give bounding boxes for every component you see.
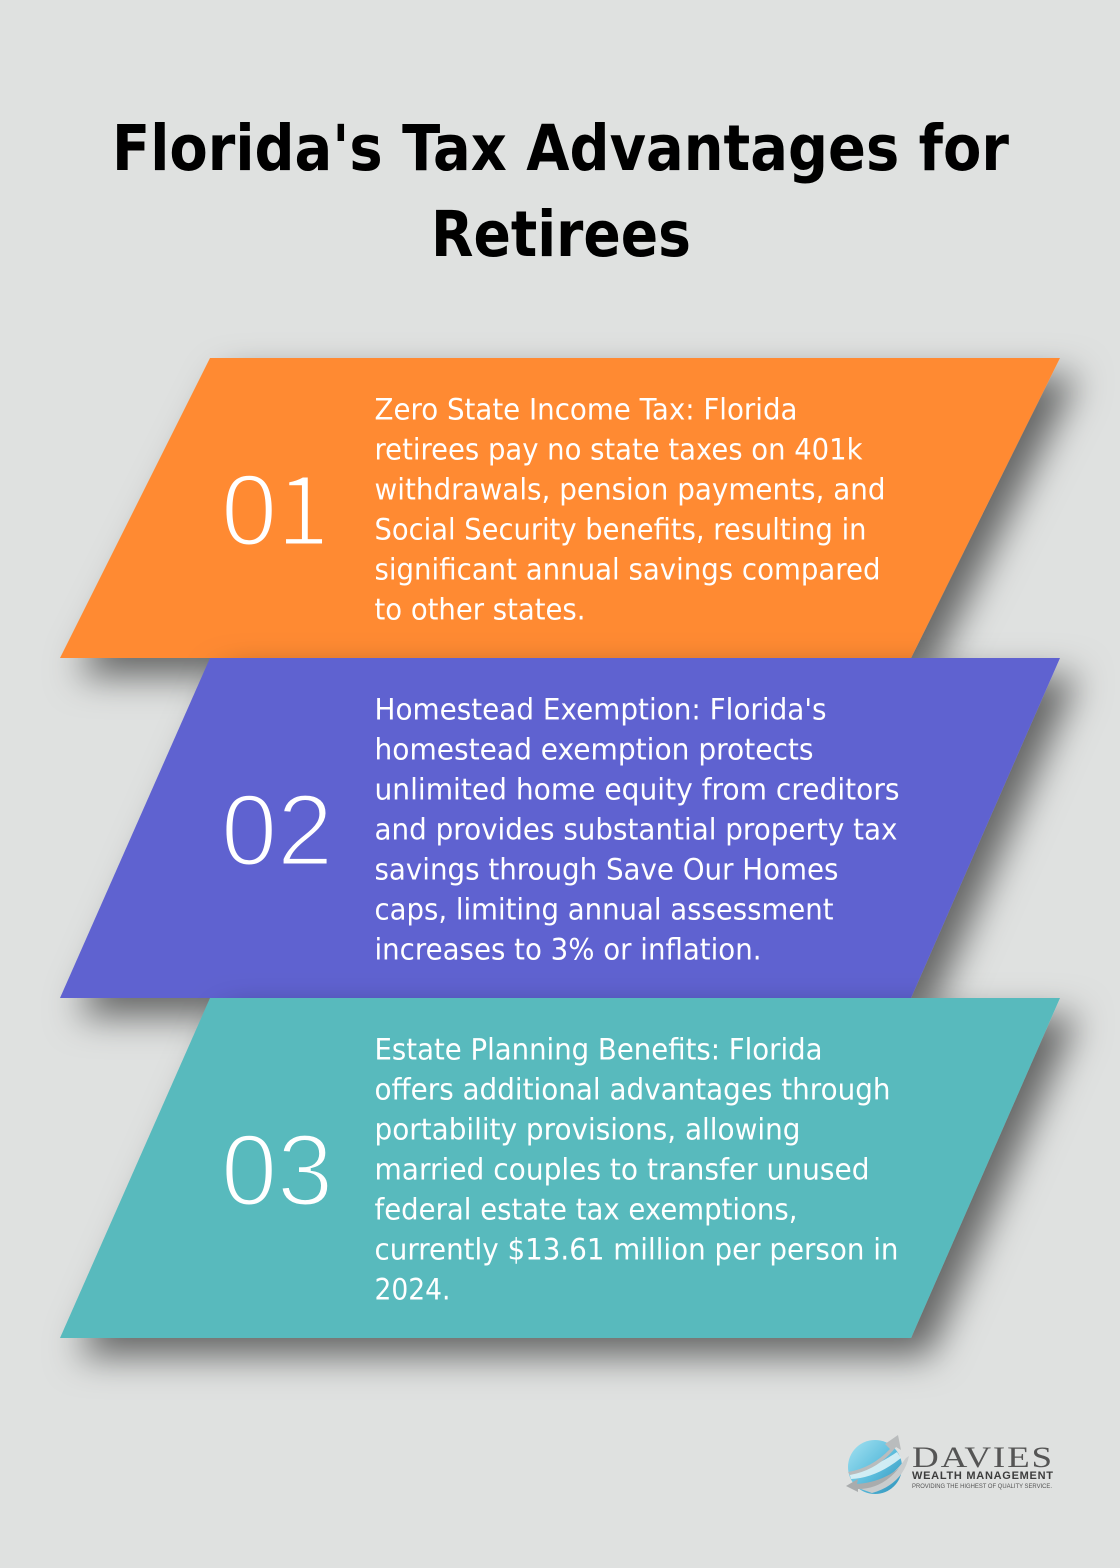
panel: estate planning benefits	[60, 998, 1060, 1338]
text block: estate planning benefits	[374, 1033, 898, 1307]
purple parallelogram	[60, 658, 1060, 998]
text block: zero state income tax: Zero State Income Tax: Florida	[374, 393, 798, 427]
text block: homestead exemption: and provides substantial property tax	[374, 813, 898, 847]
title: Florida's Tax Advantages for	[112, 112, 1009, 185]
text block: homestead exemption: caps, limiting annual assessment	[374, 893, 834, 927]
icon: globe with arrows	[846, 1435, 909, 1494]
number 01: 1	[276, 432, 330, 573]
title: Retirees	[431, 198, 691, 271]
text block: zero state income tax: to other states.	[374, 593, 586, 627]
text block: zero state income tax: retirees pay no state taxes on 401k	[374, 433, 863, 467]
logo: Davies Wealth Management	[846, 1435, 1054, 1494]
text block: zero state income tax: Social Security benefits, resulting in	[374, 513, 866, 547]
text block: estate planning benefits: federal estate tax exemptions,	[374, 1193, 798, 1227]
teal parallelogram	[60, 998, 1060, 1338]
text block: homestead exemption	[374, 693, 900, 967]
text block: estate planning benefits: offers additional advantages through	[374, 1073, 890, 1107]
text block: homestead exemption: Homestead Exemption: Florida's	[374, 693, 826, 727]
text block: estate planning benefits: married couples to transfer unused	[374, 1153, 870, 1187]
wordmark: DAVIES	[912, 1441, 1054, 1474]
text block: estate planning benefits: portability provisions, allowing	[374, 1113, 800, 1147]
orange parallelogram	[60, 358, 1060, 658]
text block: homestead exemption: increases to 3% or inflation.	[374, 933, 762, 967]
panel: zero state income tax	[60, 358, 1060, 658]
panel: homestead exemption	[60, 658, 1060, 998]
text block: zero state income tax: withdrawals, pension payments, and	[374, 473, 886, 507]
tagline: PROVIDING THE HIGHEST OF QUALITY SERVICE.	[912, 1483, 1052, 1490]
text block: zero state income tax: significant annual savings compared	[374, 553, 880, 587]
wordmark: wealth management: WEALTH MANAGEMENT	[912, 1470, 1053, 1482]
title	[112, 112, 1009, 271]
text block: estate planning benefits: currently $13.61 million per person in	[374, 1233, 898, 1267]
number 03: 03	[221, 1115, 333, 1227]
text block: estate planning benefits: 2024.	[374, 1273, 450, 1307]
number 01: 0	[221, 455, 277, 567]
text block: homestead exemption: savings through Save Our Homes	[374, 853, 838, 887]
text block: homestead exemption: unlimited home equity from creditors	[374, 773, 900, 807]
number 02: 02	[221, 775, 333, 887]
text block: homestead exemption: homestead exemption protects	[374, 733, 814, 767]
text block: zero state income tax	[374, 393, 886, 627]
text block: estate planning benefits: Estate Planning Benefits: Florida	[374, 1033, 822, 1067]
number 01	[221, 432, 330, 573]
